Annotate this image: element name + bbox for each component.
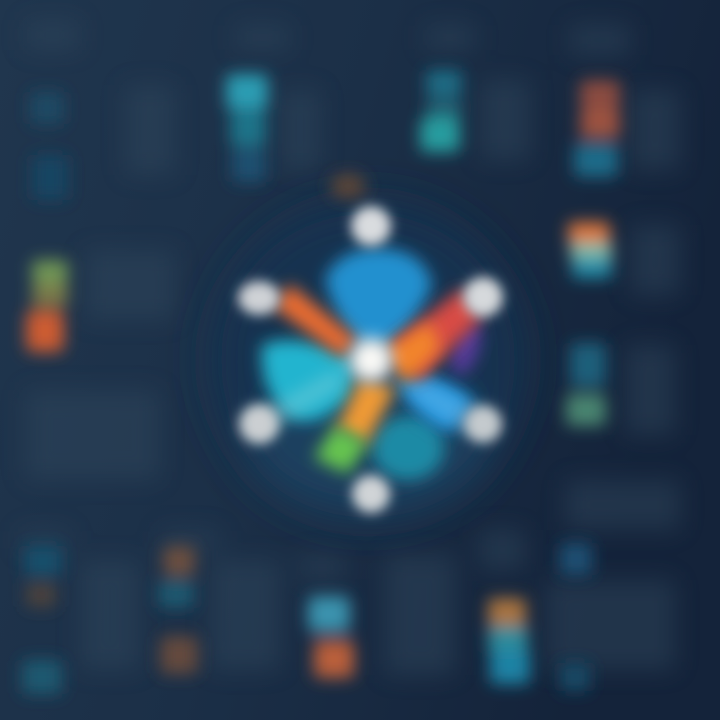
icon: upper right (568, 222, 612, 278)
icon column a (22, 546, 62, 694)
icon column 4 (574, 80, 620, 177)
icon column b (158, 546, 198, 674)
node: upper left (238, 281, 280, 315)
left icon stack (26, 260, 68, 352)
node: lower left (239, 404, 279, 444)
bottom row icons (22, 543, 592, 694)
petal: right blue (395, 375, 475, 432)
icon column 1 (30, 92, 68, 200)
spoke: upper right orange base (385, 322, 440, 385)
icon column 3 (420, 70, 462, 152)
top row icons (30, 70, 620, 200)
accent: purple (445, 317, 487, 379)
petal: bottom teal (372, 416, 444, 480)
spoke: lower right (410, 380, 482, 435)
icon column d (488, 598, 530, 684)
small orange accent above hub (330, 173, 366, 199)
right icon stacks (566, 222, 612, 426)
node: top (351, 206, 391, 246)
spoke: bottom green (314, 425, 368, 474)
node: bottom (352, 475, 390, 513)
center node (349, 338, 393, 382)
hub disc (208, 200, 528, 520)
petal: left cyan (262, 340, 355, 421)
petal: top blue (325, 248, 432, 348)
icon column c (308, 596, 354, 678)
hub petals (238, 206, 503, 513)
spoke: upper right red (390, 288, 482, 382)
node: upper right (463, 277, 503, 317)
icon column e (560, 543, 592, 691)
icon column 2 (226, 74, 268, 182)
spoke: lower left (255, 370, 345, 435)
icon: lower right (566, 343, 606, 426)
node: lower right (464, 405, 502, 443)
spoke: upper left orange (272, 284, 358, 358)
spoke: bottom orange (336, 378, 396, 445)
